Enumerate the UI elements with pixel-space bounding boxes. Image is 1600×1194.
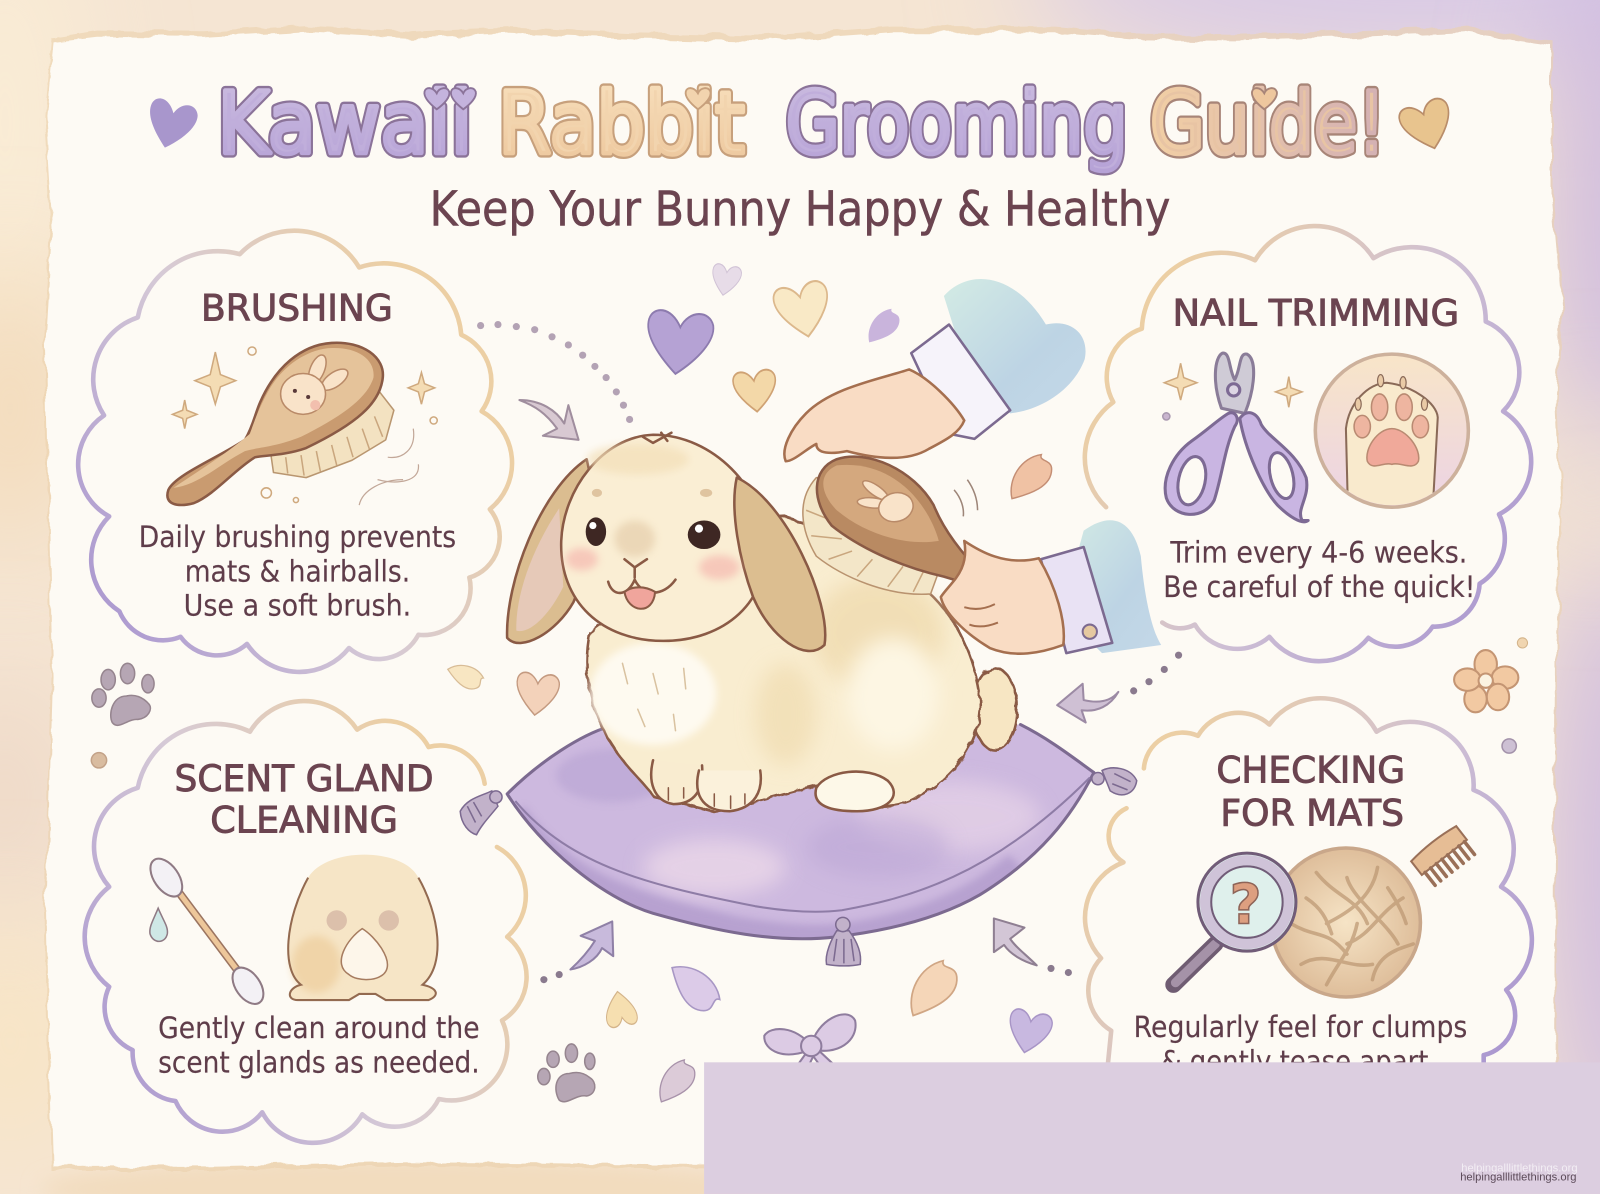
heading: BRUSHING [201,286,393,329]
watermark [1460,1162,1578,1184]
illustration: pillow [460,725,1137,966]
bottom tassel [826,917,861,966]
title word: Grooming: Grooming [786,74,1128,174]
heading: CLEANING [210,799,398,842]
right tassel [1092,768,1137,795]
arrows [477,321,1182,983]
blank overlay block [704,1062,1600,1194]
icon: magnifying glass: ? [1230,873,1262,937]
muzzle [614,520,655,557]
body text [1134,1010,1467,1078]
body text: mats & hairballs. [185,555,410,589]
mouth and tongue [608,559,676,593]
arrow: mats to rabbit [994,918,1072,976]
illustration: lower hand and sleeve [941,520,1161,654]
body text: Daily brushing prevents [139,520,456,554]
body text: Regularly feel for clumps [1134,1010,1467,1044]
bunny crest [850,468,916,531]
panel: brushing [78,231,512,672]
hand [941,541,1064,654]
cloud outline [1085,226,1531,661]
title word: Kawaii: Kawaii [217,74,472,174]
cheeks [565,548,598,570]
sleeve [944,279,1086,413]
title word: Guide!: Guide! [1150,74,1386,174]
sleeve [1061,520,1161,653]
eyes [586,517,606,546]
heading: FOR MATS [1220,792,1404,835]
body text: Trim every 4-6 weeks. [1169,535,1467,569]
body [587,510,980,811]
watermark: helpingalllittlethings.org [1460,1172,1577,1184]
right ear [734,478,825,651]
body text [139,520,456,622]
body text: Be careful of the quick! [1163,570,1476,604]
illustration: held brush [803,457,985,594]
heart dots on the i letters [424,88,1277,109]
chest fur strokes [622,663,686,731]
arrow: brushing to rabbit [477,321,633,440]
heading: NAIL TRIMMING [1172,292,1459,335]
bristles [803,478,939,594]
sparkles [1163,363,1302,420]
icon: paw print bottom [538,1044,595,1102]
watermark: helpingalllittlethings.org [1461,1162,1578,1174]
icon: bunny rear [288,855,438,1000]
title [142,74,1459,174]
title word: Grooming: Grooming [786,74,1128,174]
icon: magnifying glass [1173,853,1296,985]
body text: scent glands as needed. [158,1046,480,1080]
panel: checking for mats [1085,698,1532,1082]
panel: nail trimming [1085,226,1531,661]
icon: mat of fur [1271,848,1420,997]
icon: cotton swab [144,853,270,1010]
title word: Rabbit: Rabbit [498,74,745,174]
left tassel [460,791,502,835]
heart: title right [1397,96,1459,156]
subtitle: Keep Your Bunny Happy & Healthy [430,182,1170,238]
icon: comb [1410,824,1477,888]
body text [158,1011,480,1080]
hand [784,369,964,461]
left ear [507,459,602,643]
head [561,435,766,641]
heart: title left [142,96,200,154]
illustration: upper hand and sleeve [784,279,1086,461]
title word: Rabbit: Rabbit [498,74,745,174]
heading: SCENT GLAND [174,757,434,800]
cloud outline [1085,698,1532,1082]
brush body [817,457,985,587]
cloud outline [78,231,512,672]
icon: paw print left [92,663,154,725]
body text: & gently tease apart. [1161,1044,1437,1078]
icon: bow [764,1014,856,1082]
heading [1216,749,1405,835]
cloud outline [85,701,527,1143]
title word: Guide!: Guide! [1150,74,1386,174]
icon: nail clippers [1165,353,1308,522]
arrow: nail trimming to rabbit [1057,652,1182,723]
decorations: hearts and petals [91,263,1528,1102]
icon: paw circle [1315,354,1468,510]
paws [651,760,894,811]
heading [174,757,434,842]
body text [1163,535,1476,604]
illustration: rabbit [507,433,1017,811]
cuff [1041,547,1112,653]
title word: Kawaii: Kawaii [217,74,472,174]
body text: Gently clean around the [158,1011,480,1045]
sparkles and dots [172,347,437,503]
tail [972,668,1017,750]
panel: scent gland cleaning [85,701,527,1143]
heading: CHECKING [1216,749,1405,792]
icon: wooden brush [167,343,418,505]
icon: flower [1454,650,1518,712]
cuff [911,325,1010,439]
arrow: scent gland to rabbit [540,921,613,983]
body text: Use a soft brush. [184,588,411,622]
